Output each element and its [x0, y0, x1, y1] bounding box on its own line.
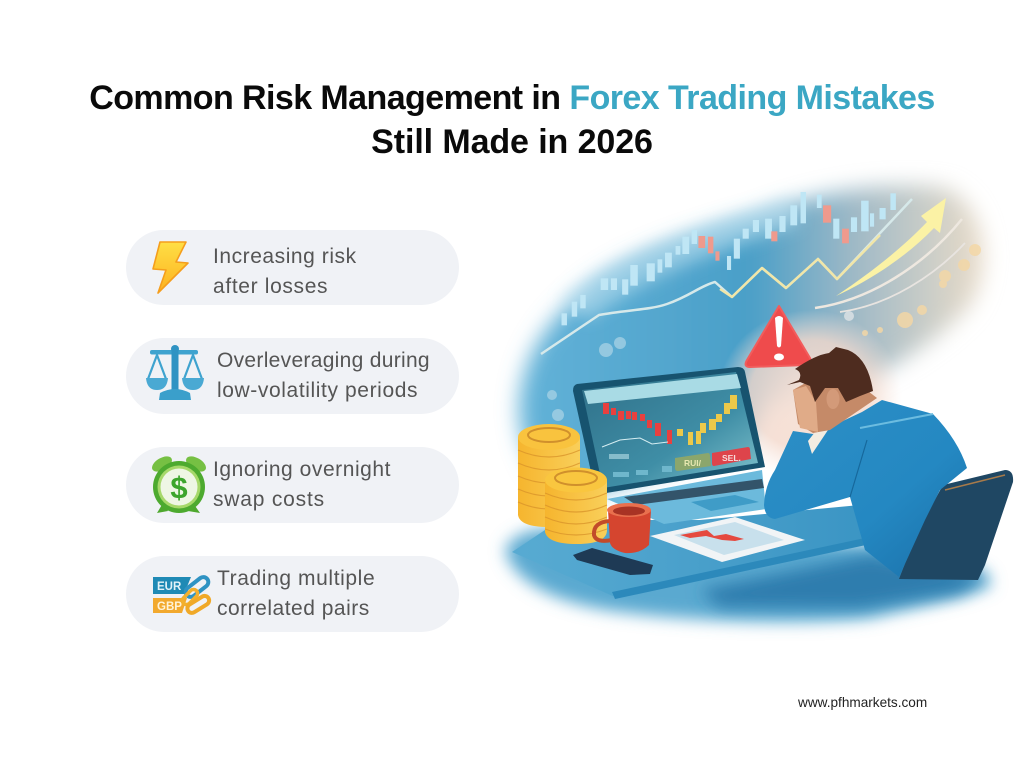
icon: balance scale	[146, 345, 204, 400]
hair	[787, 347, 873, 402]
coin stack back	[518, 424, 580, 527]
coin stack front	[545, 468, 607, 544]
chair	[899, 470, 1013, 580]
panel: increasing risk	[126, 230, 459, 305]
panel: overleveraging: low-volatility periods	[217, 379, 418, 402]
phone	[573, 548, 653, 575]
sell button	[712, 447, 751, 466]
panel: increasing risk: Increasing risk	[213, 245, 357, 268]
panel: correlated pairs: Trading multiple	[217, 567, 375, 590]
rising price line	[541, 199, 912, 354]
screen candles	[603, 403, 672, 444]
dark floor shading	[700, 555, 985, 608]
warm glow behind warning	[718, 310, 902, 480]
icon: lightning bolt	[153, 242, 188, 293]
panel: overleveraging	[126, 338, 459, 414]
title: Still Made in 2026	[371, 123, 653, 161]
desk top	[512, 505, 865, 597]
desk and lower wash	[505, 528, 992, 622]
yellow arrow	[836, 198, 946, 296]
icon: green alarm clock with dollar: $	[170, 470, 188, 505]
icon: EUR GBP chain links	[153, 575, 211, 615]
buy button: RUI/	[684, 458, 702, 468]
icon: EUR GBP chain links: GBP	[157, 601, 182, 613]
panel: overnight swap: Ignoring overnight	[213, 458, 391, 481]
neck and face	[793, 372, 877, 433]
jacket	[764, 400, 967, 577]
icon: EUR GBP chain links: EUR	[157, 581, 182, 593]
pale mist at top of sky	[560, 198, 800, 320]
laptop base	[607, 470, 766, 524]
laptop lid	[573, 367, 765, 494]
title: Common Risk Management in Forex Trading Mistakes	[89, 79, 935, 117]
white streaks	[815, 219, 962, 308]
bokeh lights	[862, 244, 981, 336]
illustration: stressed forex trader	[505, 186, 1013, 622]
background wash: chart sky	[519, 186, 984, 500]
coffee mug	[594, 503, 651, 553]
title	[89, 79, 935, 161]
sell button: SEL.	[722, 453, 741, 463]
panel: overleveraging: Overleveraging during	[217, 349, 430, 372]
laptop	[573, 367, 766, 524]
panel: correlated pairs: correlated pairs	[217, 597, 370, 620]
panel: increasing risk: after losses	[213, 275, 328, 298]
buy button	[675, 453, 711, 471]
paper with chart	[650, 517, 805, 562]
icon: green alarm clock with dollar	[149, 453, 209, 513]
website url: www.pfhmarkets.com	[798, 695, 927, 710]
warning triangle	[746, 306, 811, 367]
hand on forehead	[793, 386, 818, 432]
man	[764, 347, 967, 577]
shirt cuff	[808, 423, 830, 454]
ear	[826, 389, 840, 409]
panel: overnight swap: swap costs	[213, 488, 325, 511]
panel: correlated pairs	[126, 556, 459, 632]
panel: overnight swap	[126, 447, 459, 523]
candlesticks on sky	[562, 192, 896, 325]
